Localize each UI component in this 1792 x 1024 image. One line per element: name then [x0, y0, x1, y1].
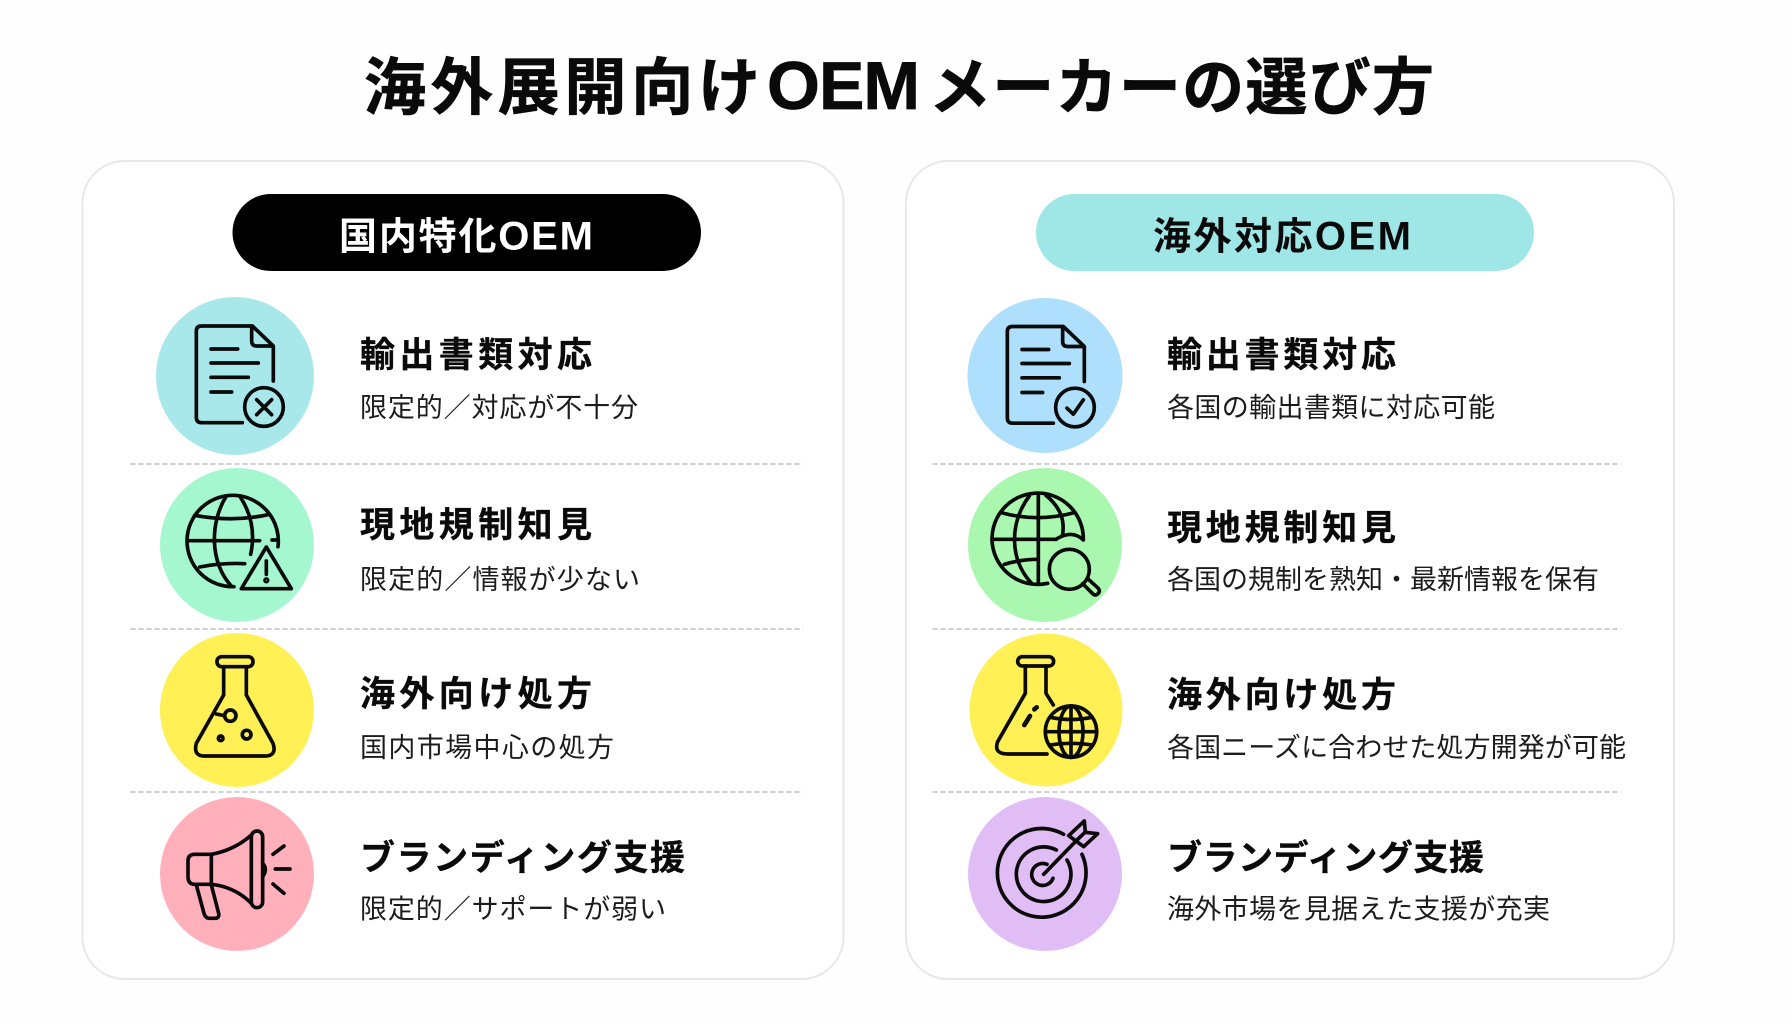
row text: 各国ニーズに合わせた処方開発が可能	[1167, 733, 1626, 763]
title: 海外展開向け	[364, 54, 760, 123]
title: OEM	[767, 48, 920, 124]
icon: document with check	[968, 298, 1122, 453]
panel: overseas OEM	[906, 161, 1674, 979]
row: local regulations, limited	[160, 468, 640, 622]
row text	[360, 336, 638, 423]
icon: globe with magnifier	[968, 468, 1122, 622]
row text: 輸出書類対応	[360, 336, 592, 375]
icon: globe with warning	[160, 468, 314, 622]
row text: ブランディング支援	[360, 838, 685, 878]
row: branding support, limited	[160, 797, 685, 951]
row text: 限定的／情報が少ない	[360, 565, 640, 595]
row text: ブランディング支援	[1167, 838, 1484, 878]
row: overseas formulation, supported	[970, 634, 1626, 786]
row text	[360, 506, 640, 595]
row text: 輸出書類対応	[1167, 336, 1396, 375]
row: export documents, limited	[156, 297, 638, 455]
title	[364, 48, 1434, 124]
row: branding support, supported	[968, 797, 1550, 951]
icon: megaphone	[160, 797, 314, 951]
icon: flask	[160, 633, 314, 787]
row text: 現地規制知見	[1167, 509, 1396, 548]
heading pill: domestic OEM	[232, 194, 701, 271]
row text	[1167, 509, 1599, 595]
row text	[1167, 838, 1550, 924]
row text: 海外市場を見据えた支援が充実	[1167, 894, 1550, 924]
heading pill: domestic OEM: 国内特化OEM	[339, 214, 593, 258]
row text: 海外向け処方	[360, 675, 592, 714]
icon: document with cross	[156, 297, 314, 455]
row: overseas formulation, domestic	[160, 633, 614, 787]
row text: 国内市場中心の処方	[360, 733, 614, 763]
row text	[1167, 676, 1626, 763]
icon: target with arrow	[968, 797, 1122, 951]
title: メーカーの選び方	[929, 54, 1434, 123]
panel: domestic OEM	[82, 161, 844, 979]
row: local regulations, supported	[968, 468, 1599, 622]
row: export documents, supported	[968, 298, 1495, 453]
row text	[360, 675, 614, 763]
heading pill: overseas OEM: 海外対応OEM	[1153, 214, 1411, 258]
heading pill: overseas OEM	[1036, 194, 1534, 271]
row text: 各国の規制を熟知・最新情報を保有	[1167, 565, 1599, 595]
icon: flask with globe	[970, 634, 1122, 786]
row text: 海外向け処方	[1167, 676, 1396, 715]
row text: 限定的／対応が不十分	[360, 393, 638, 423]
row text: 各国の輸出書類に対応可能	[1167, 393, 1495, 423]
row text	[360, 838, 685, 924]
row text: 限定的／サポートが弱い	[360, 894, 666, 924]
row text	[1167, 336, 1495, 423]
row text: 現地規制知見	[360, 506, 592, 545]
